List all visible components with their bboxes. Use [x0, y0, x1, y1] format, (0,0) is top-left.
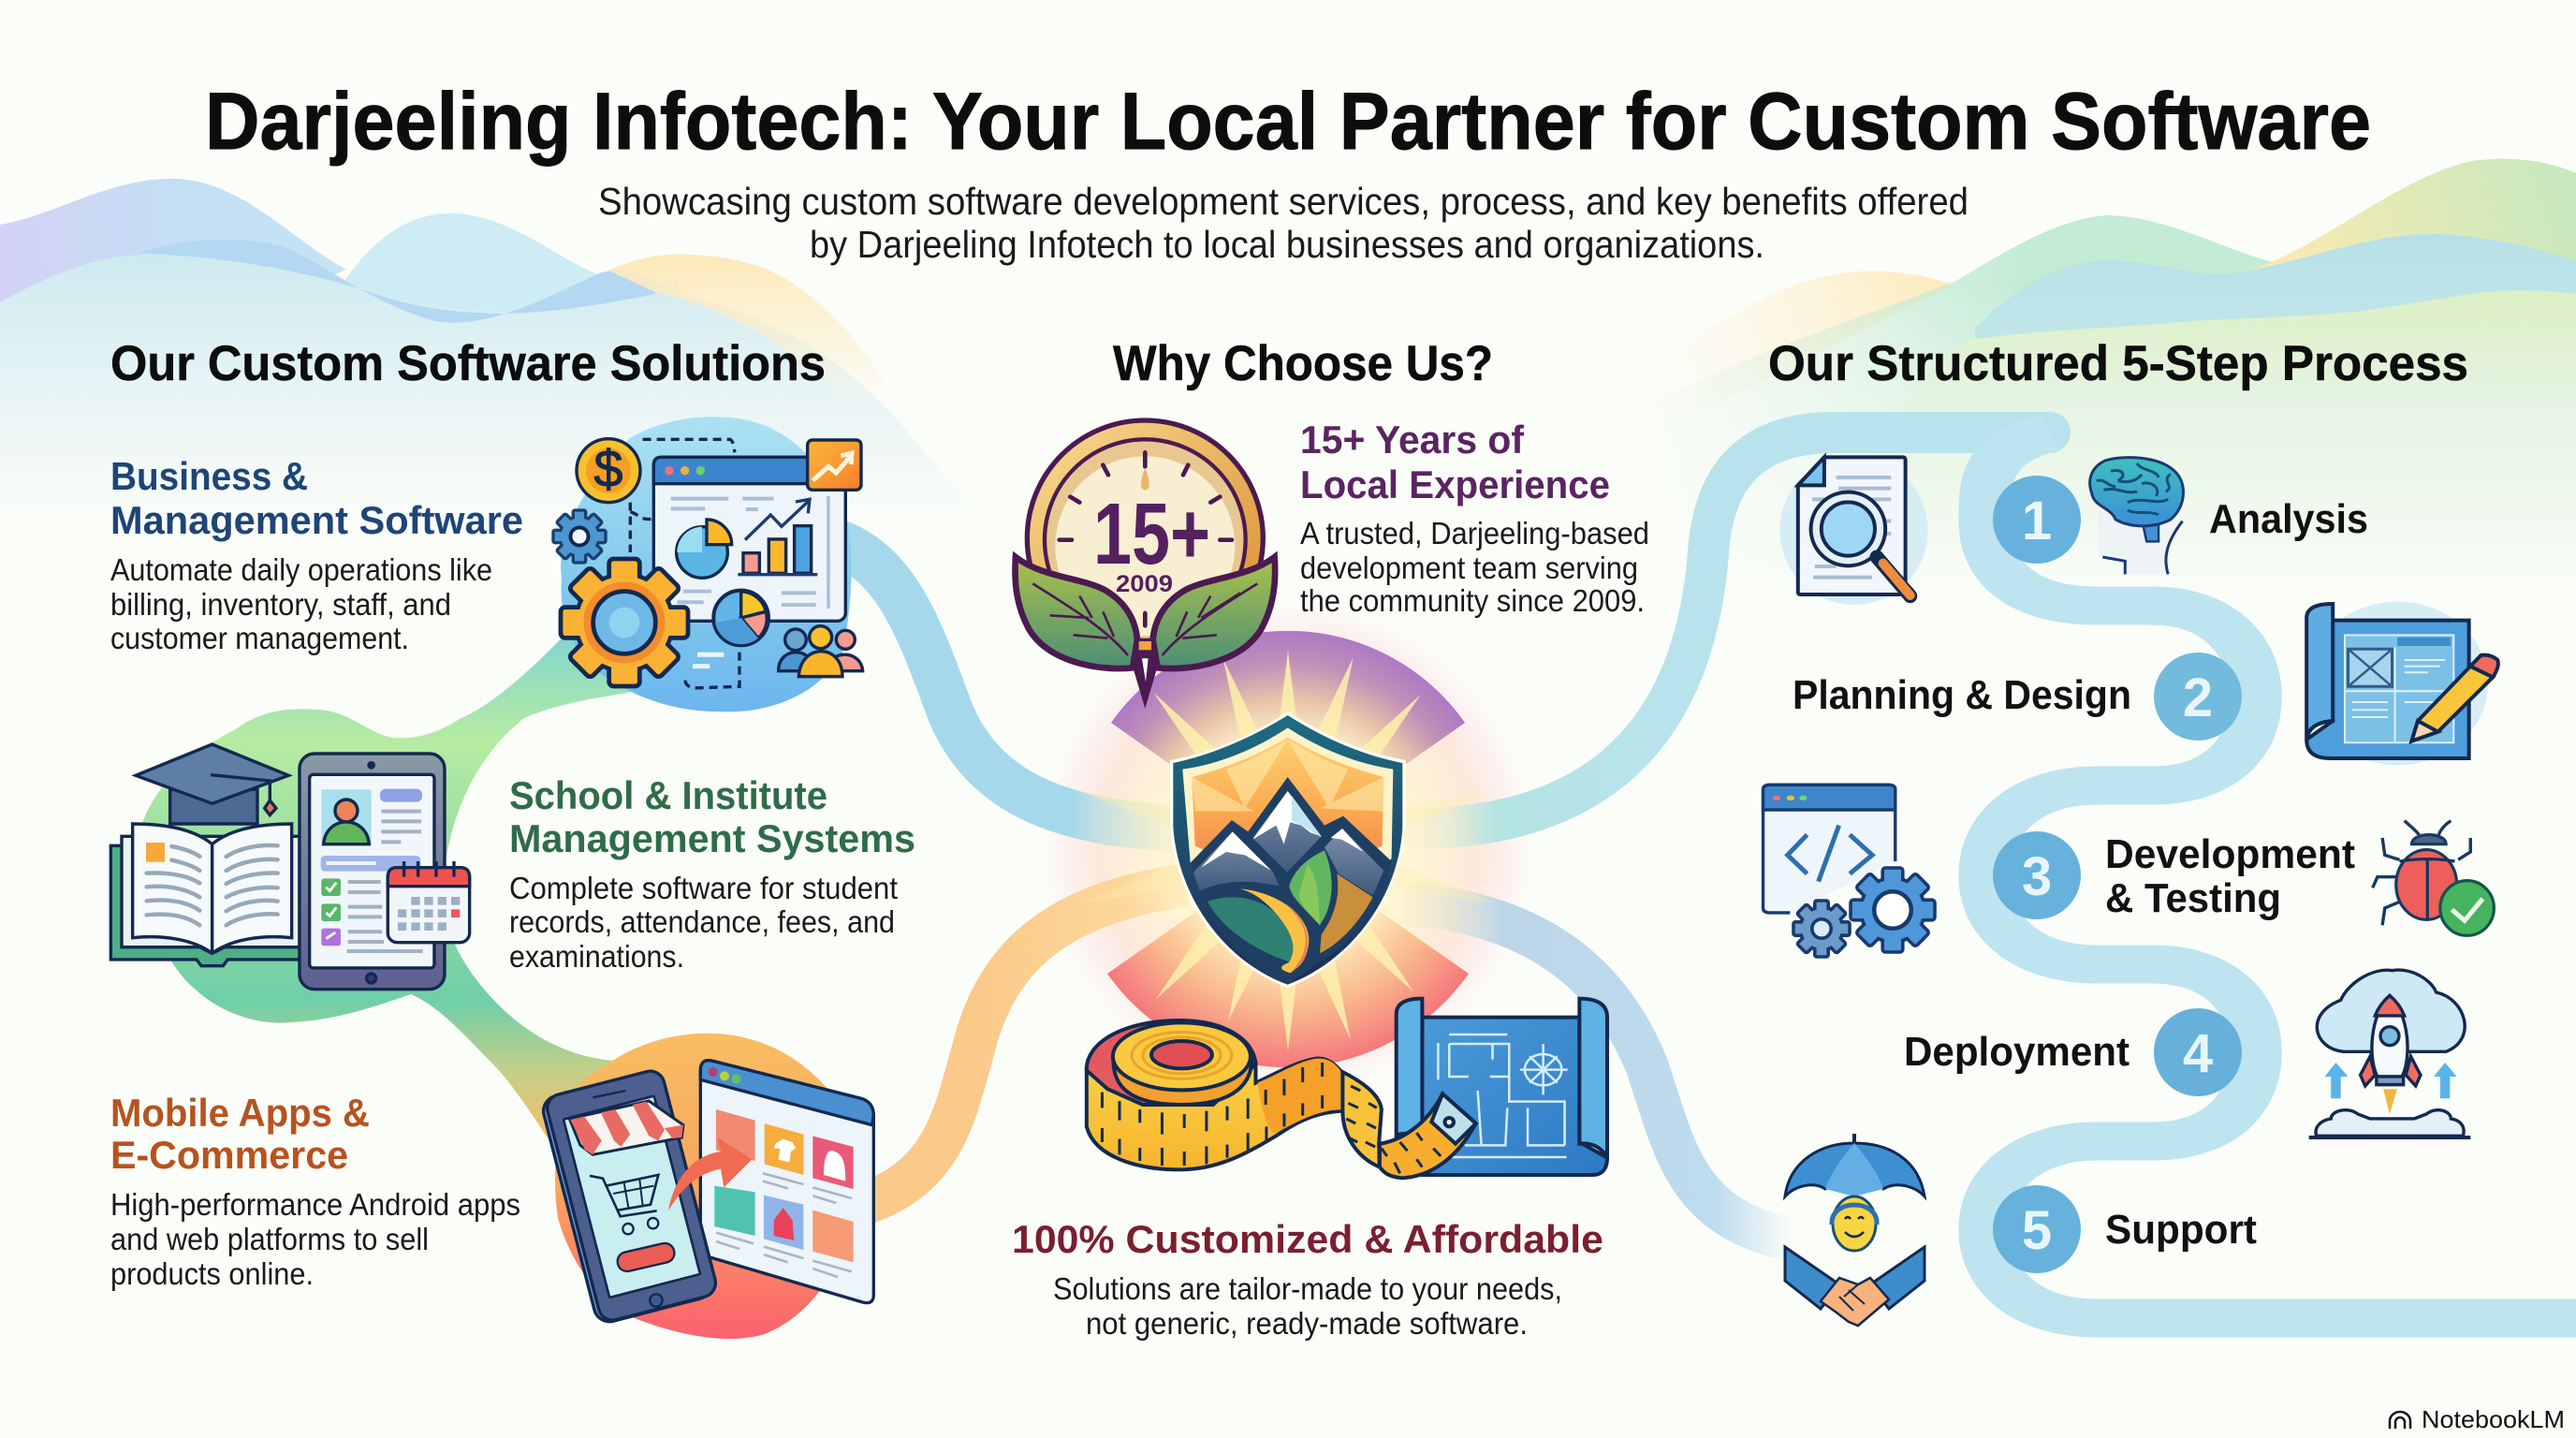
icon: mountain shield	[1170, 712, 1406, 988]
label: development and testing	[2105, 831, 2355, 921]
text: business description	[110, 553, 492, 656]
icon: measuring tape	[1087, 1020, 1476, 1178]
text: experience description: A trusted, Darjeeling-based	[1300, 517, 1649, 551]
text: customized description: Solutions are tailor-made to your needs,	[1053, 1272, 1562, 1307]
solutions background blobs	[139, 417, 857, 1339]
text: business heading: Business &	[110, 454, 308, 498]
process ribbon	[1984, 433, 2576, 1318]
icon: code window gears	[1793, 868, 1935, 957]
text: mobile heading: E-Commerce	[110, 1133, 348, 1177]
icon: wireframe blueprint and pencil	[2306, 602, 2498, 765]
notebooklm watermark: NotebookLM	[2422, 1405, 2565, 1433]
icon: rocket launch from cloud	[2309, 970, 2470, 1137]
title: Darjeeling Infotech: Your Local Partner for Custom Software	[205, 77, 2371, 167]
icon: brain	[2090, 458, 2184, 574]
text: experience description: development team serving	[1300, 551, 1638, 586]
icon: 15+ years badge	[1015, 420, 1275, 705]
text: experience description: the community since 2009.	[1300, 584, 1645, 619]
panel: school systems	[110, 744, 915, 990]
text: experience heading: 15+ Years of	[1300, 418, 1525, 462]
label: planning and design: Planning & Design	[1793, 672, 2131, 718]
text: school description: Complete software for student	[509, 872, 899, 906]
panel: mobile and e-commerce	[110, 1061, 873, 1325]
text: business description: customer management.	[110, 622, 409, 656]
text: experience heading: Local Experience	[1300, 462, 1610, 506]
step 4 marker: 4	[2183, 1023, 2213, 1084]
text: experience description	[1300, 517, 1649, 619]
text: mobile heading: Mobile Apps &	[110, 1091, 370, 1135]
text: 15+ in badge: 15+	[1093, 485, 1210, 582]
text: business heading: Management Software	[110, 498, 523, 542]
text: business description: billing, inventory, staff, and	[110, 588, 451, 623]
step 2 marker	[2154, 653, 2242, 741]
text: school heading: Management Systems	[509, 816, 915, 860]
text: business description: Automate daily operations like	[110, 553, 492, 588]
text: customized description	[1053, 1272, 1562, 1342]
step 4 marker	[2154, 1008, 2242, 1096]
icon: phone shop and web store	[540, 1061, 873, 1325]
heading: solutions: Our Custom Software Solutions	[110, 336, 826, 391]
icon: book, cap, tablet, calendar	[110, 744, 470, 990]
text: business heading	[110, 454, 523, 542]
text: school description: records, attendance, fees, and	[509, 905, 895, 940]
background waves: right	[1684, 159, 2576, 528]
text: mobile description: High-performance Android apps	[110, 1188, 520, 1223]
icon: blueprint	[1397, 999, 1607, 1175]
step 2 marker: 2	[2183, 668, 2213, 728]
icon: document with magnifier	[1779, 456, 1928, 605]
label: analysis: Analysis	[2209, 496, 2368, 542]
step 1 marker	[1993, 476, 2081, 564]
text: experience heading	[1300, 418, 1610, 506]
icon: support umbrella and handshake	[1785, 1134, 1925, 1326]
icon: small gear	[553, 510, 606, 563]
icon: code window	[1764, 785, 1895, 913]
step 5 marker	[1993, 1185, 2081, 1273]
subtitle	[598, 180, 1969, 266]
heading: why choose us: Why Choose Us?	[1113, 336, 1493, 391]
step 1 marker: 1	[2022, 491, 2052, 551]
step 3 marker: 3	[2022, 846, 2052, 907]
text: school heading	[509, 773, 915, 860]
icon: large orange gear	[561, 559, 688, 686]
text: school description	[509, 872, 899, 975]
panel: process steps	[1764, 456, 2498, 1326]
text: school heading: School & Institute	[509, 773, 827, 817]
flow ribbons connecting solutions and process to shield	[833, 433, 2050, 1240]
step 5 marker: 5	[2022, 1200, 2052, 1261]
central glow disc	[1043, 602, 1533, 1093]
text: mobile description: products online.	[110, 1257, 314, 1292]
text: mobile description	[110, 1188, 520, 1292]
label: development and testing: Development	[2105, 831, 2355, 877]
panel: business software	[110, 439, 863, 688]
icon: business dashboard	[553, 439, 863, 688]
text: customized description: not generic, ready-made software.	[1086, 1307, 1528, 1342]
label: support: Support	[2105, 1207, 2257, 1253]
text: mobile description: and web platforms to sell	[110, 1223, 429, 1257]
text: school description: examinations.	[509, 940, 684, 975]
step 3 marker	[1993, 831, 2081, 919]
subtitle: by Darjeeling Infotech to local businesses and organizations.	[810, 223, 1764, 266]
central wedges and rays	[1074, 631, 1502, 1067]
heading: process: Our Structured 5-Step Process	[1768, 336, 2468, 391]
background waves: left	[0, 179, 992, 534]
text: 2009 in badge: 2009	[1116, 571, 1173, 597]
text: dollar sign: $	[593, 439, 623, 498]
subtitle: Showcasing custom software development services, process, and key benefits offered	[598, 180, 1969, 223]
text: customized heading: 100% Customized & Affordable	[1012, 1217, 1603, 1261]
label: deployment: Deployment	[1904, 1029, 2130, 1075]
icon: bug with check	[2373, 821, 2494, 935]
text: mobile heading	[110, 1091, 370, 1177]
panel: why choose us	[1012, 418, 1649, 1342]
label: development and testing: & Testing	[2105, 875, 2281, 921]
